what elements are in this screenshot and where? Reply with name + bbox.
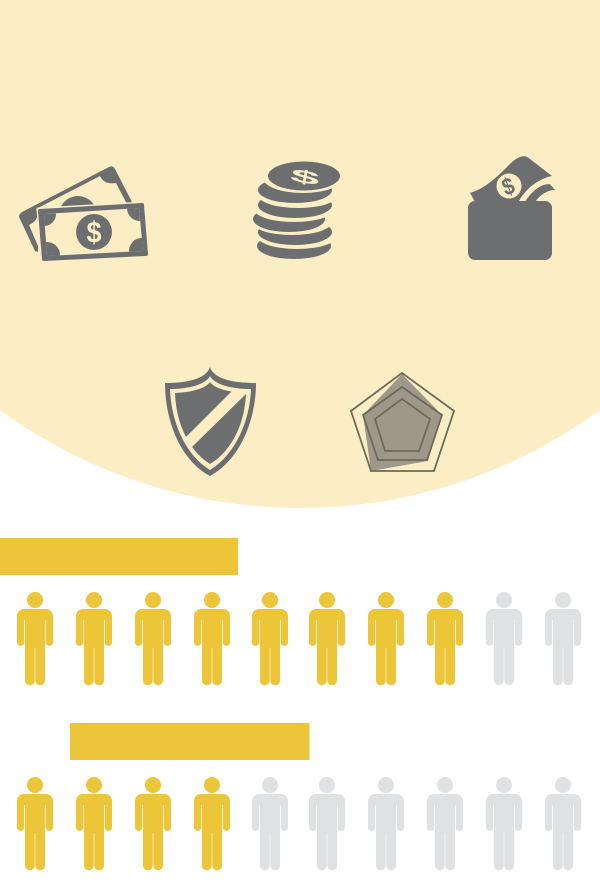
icon: wallet with cash: $	[498, 172, 519, 201]
bar 1	[0, 538, 238, 575]
icon: wallet with cash	[468, 156, 555, 260]
icon: banknotes	[19, 166, 148, 261]
people row 2	[17, 777, 581, 870]
icon: coin stack	[252, 162, 343, 259]
icon: radar pentagon	[351, 373, 454, 471]
panel: cream circle background	[0, 0, 600, 508]
icon: shield	[165, 367, 256, 476]
icon: coin stack: $	[289, 165, 321, 190]
bar 2	[70, 723, 310, 760]
icon: banknotes: $	[86, 216, 102, 250]
people row 1	[17, 592, 581, 685]
